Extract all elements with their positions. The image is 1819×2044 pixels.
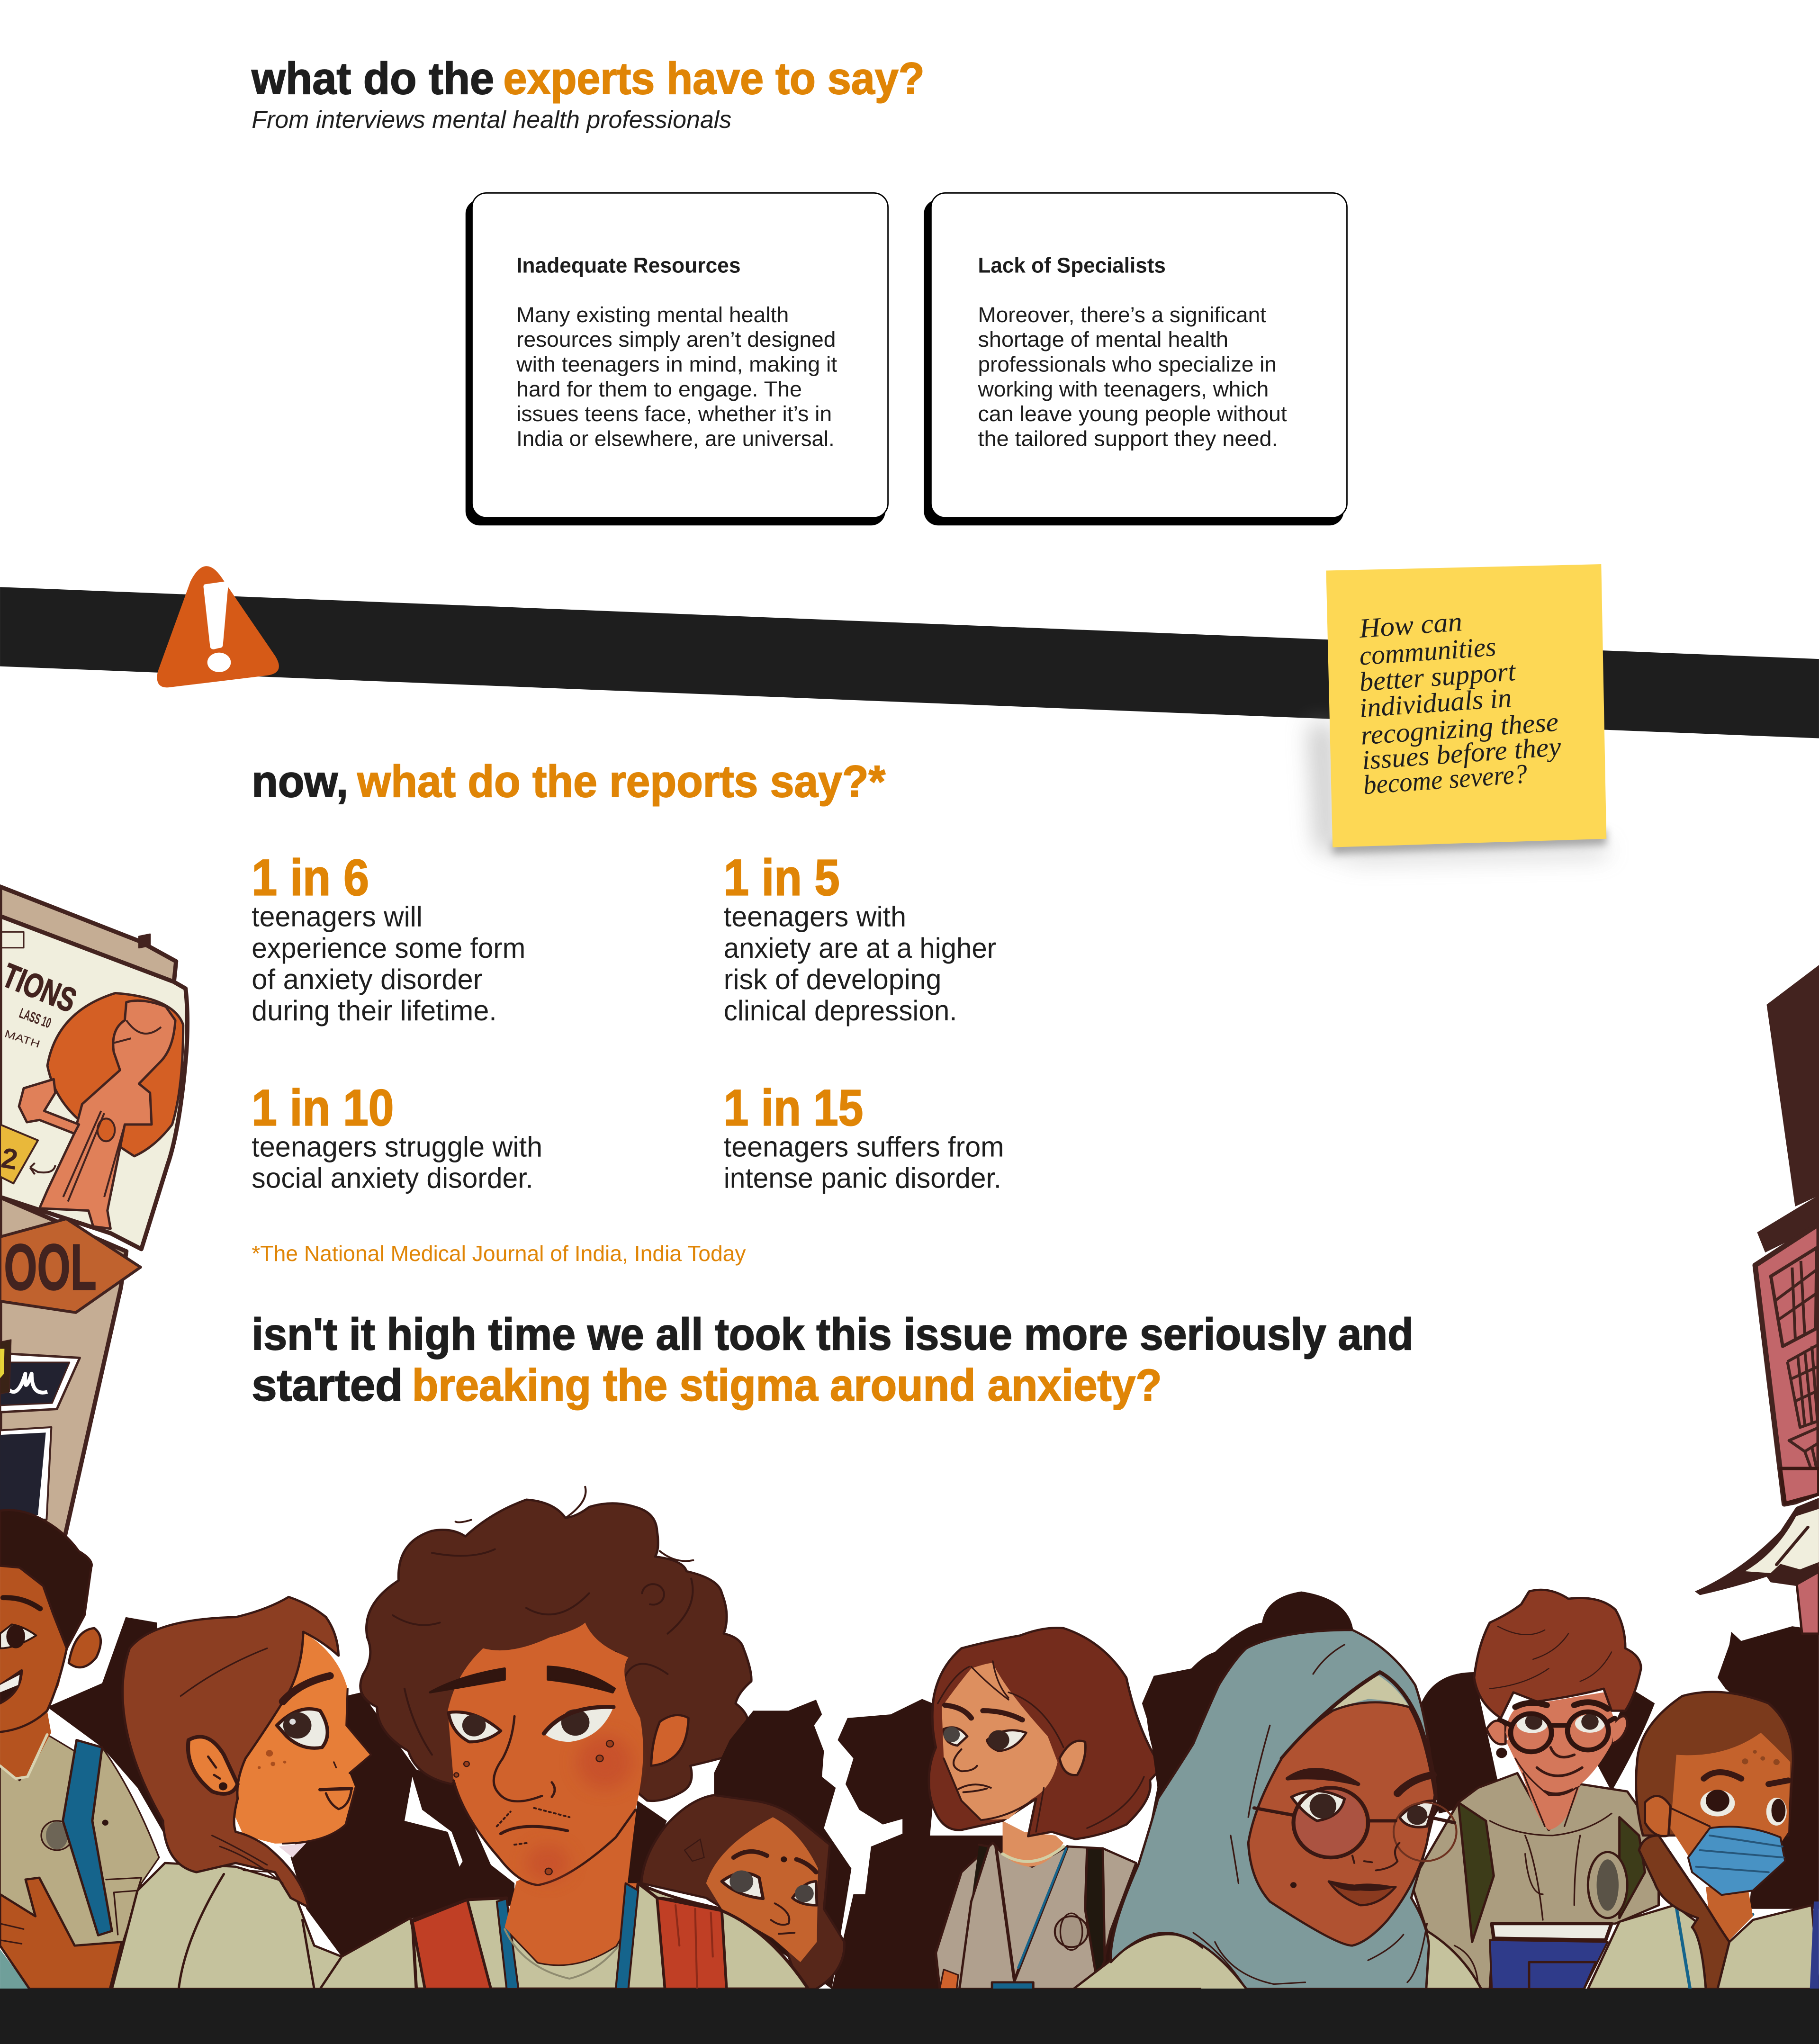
- icon: warning triangle: [157, 566, 279, 687]
- sticky note handwriting: individuals in: [1358, 682, 1513, 723]
- panel: inadequate resources: [466, 193, 888, 525]
- stat: 1 in 10: teenagers struggle with: [252, 1131, 542, 1163]
- shop sign: [0, 1219, 141, 1313]
- card title: inadequate resources: Inadequate Resources: [516, 253, 741, 277]
- pink wall: [1755, 1224, 1819, 1504]
- heading: experts: what do the: [251, 54, 494, 104]
- silhouettes behind left group: [47, 1617, 514, 1957]
- stat: 1 in 15: intense panic disorder.: [724, 1162, 1001, 1194]
- card body: lack of specialists: [977, 303, 1287, 450]
- heading: reports: now,: [252, 756, 348, 807]
- illustration: crowd of teenagers: [0, 1468, 1819, 2044]
- stat: 1 in 5: [724, 849, 996, 1027]
- centre silhouettes: [628, 1637, 1232, 1989]
- sticky note handwriting: better support: [1358, 656, 1517, 697]
- diagonal dark band: [0, 587, 1819, 738]
- stat: 1 in 6: of anxiety disorder: [252, 963, 483, 995]
- sign text: OOL: [4, 1231, 97, 1304]
- illustration: red building: [1755, 965, 1819, 1504]
- stat: 1 in 5: anxiety are at a higher: [724, 932, 996, 964]
- card body: lack of specialists: professionals who specialize in: [978, 352, 1277, 376]
- stat: 1 in 6: [252, 849, 525, 1027]
- zoom offset group: right group: [1073, 1468, 1819, 1989]
- orange circle on poster: [47, 993, 183, 1156]
- zoom offset group: centre characters: [628, 1637, 1232, 1989]
- building post and eave: [1695, 1468, 1819, 1634]
- heading: experts: [251, 54, 925, 104]
- bottom band: [0, 1989, 1819, 2044]
- sticky note handwriting: recognizing these: [1360, 706, 1559, 751]
- chalk board: [0, 1340, 80, 1412]
- card body: inadequate resources: issues teens face, whether it’s in: [516, 402, 832, 426]
- closing statement: isn't it high time we all took this issue more seriously and: [252, 1309, 1414, 1360]
- sticky note handwriting: How can: [1358, 606, 1463, 644]
- windows: [1771, 1248, 1819, 1471]
- roof block: [1767, 965, 1819, 1206]
- poster class text: LASS 10: [17, 1006, 53, 1031]
- stat: 1 in 5: 1 in 5: [724, 849, 840, 906]
- character: boy with curly hair: [360, 1487, 808, 1989]
- stat: 1 in 10: 1 in 10: [252, 1080, 394, 1136]
- heading: reports: what do the reports say?*: [357, 756, 885, 807]
- heading: experts: experts have to say?: [504, 54, 925, 104]
- sticky note handwriting: issues before they: [1361, 731, 1562, 775]
- silhouettes behind hijab and mask: [1147, 1592, 1819, 1909]
- sticky note handwriting: become severe?: [1362, 758, 1528, 800]
- character: small girl: [641, 1795, 845, 1989]
- stat: 1 in 5: clinical depression.: [724, 994, 957, 1027]
- card body: inadequate resources: India or elsewhere, are universal.: [516, 426, 835, 450]
- character: boy with glasses and hoodie: [1411, 1590, 1659, 1989]
- building wall: [0, 1197, 126, 1537]
- card body: lack of specialists: working with teenagers, which: [977, 377, 1269, 401]
- yellow score tag: [0, 1125, 38, 1183]
- card body: inadequate resources: resources simply aren’t designed: [516, 327, 836, 351]
- card body: lack of specialists: can leave young people without: [978, 402, 1287, 426]
- card body: inadequate resources: hard for them to engage. The: [516, 377, 802, 401]
- stat: 1 in 15: 1 in 15: [724, 1080, 863, 1136]
- card body: lack of specialists: shortage of mental health: [978, 327, 1228, 351]
- card body: inadequate resources: [516, 303, 837, 450]
- stat: 1 in 5: teenagers with: [724, 900, 906, 933]
- illustration: school building with exam poster: [0, 887, 188, 1537]
- card body: inadequate resources: with teenagers in mind, making it: [516, 352, 837, 376]
- poster title text: TIONS: [0, 956, 81, 1020]
- stat: 1 in 10: social anxiety disorder.: [252, 1162, 533, 1194]
- card body: lack of specialists: the tailored support they need.: [978, 426, 1278, 450]
- stat: 1 in 6: during their lifetime.: [252, 994, 497, 1027]
- sticky note handwriting: [1358, 606, 1562, 800]
- stat: 1 in 15: teenagers suffers from: [724, 1131, 1004, 1163]
- character: girl with face mask: [1588, 1692, 1819, 1989]
- stat: 1 in 6: 1 in 6: [252, 849, 369, 906]
- closing statement: breaking the stigma around anxiety?: [412, 1360, 1162, 1410]
- card body: inadequate resources: Many existing mental health: [516, 303, 789, 327]
- poster subject text: MATH: [3, 1027, 42, 1050]
- card body: lack of specialists: Moreover, there’s a significant: [978, 303, 1266, 327]
- sticky note: [1309, 564, 1606, 861]
- stat: 1 in 6: teenagers will: [252, 900, 423, 933]
- character: girl with braid: [112, 1597, 424, 1989]
- character: boy with backpack: [0, 1510, 159, 1989]
- panel: lack of specialists: [924, 193, 1347, 525]
- closing statement: [252, 1309, 1414, 1410]
- zoom offset group: right of centre: [929, 1628, 1162, 1991]
- subheading: From interviews mental health professionals: [252, 106, 731, 134]
- poster board: [0, 887, 188, 1249]
- character: girl in hijab: [1073, 1630, 1481, 1989]
- stat: 1 in 10: [252, 1080, 542, 1194]
- character: girl with short hair: [929, 1628, 1162, 1991]
- closing statement: started: [252, 1360, 403, 1410]
- poster figure: [19, 1000, 175, 1229]
- door: [0, 1427, 51, 1520]
- ledge: [1757, 1195, 1819, 1252]
- card title: lack of specialists: Lack of Specialists: [978, 253, 1166, 277]
- stat: 1 in 6: experience some form: [252, 932, 525, 964]
- character: boy straps overlay on small girl: [616, 1883, 808, 1989]
- sticky note handwriting: communities: [1358, 631, 1497, 671]
- stat: 1 in 5: risk of developing: [724, 963, 941, 995]
- footnote: sources: *The National Medical Journal of India, India Today: [252, 1241, 746, 1266]
- stat: 1 in 15: [724, 1080, 1004, 1194]
